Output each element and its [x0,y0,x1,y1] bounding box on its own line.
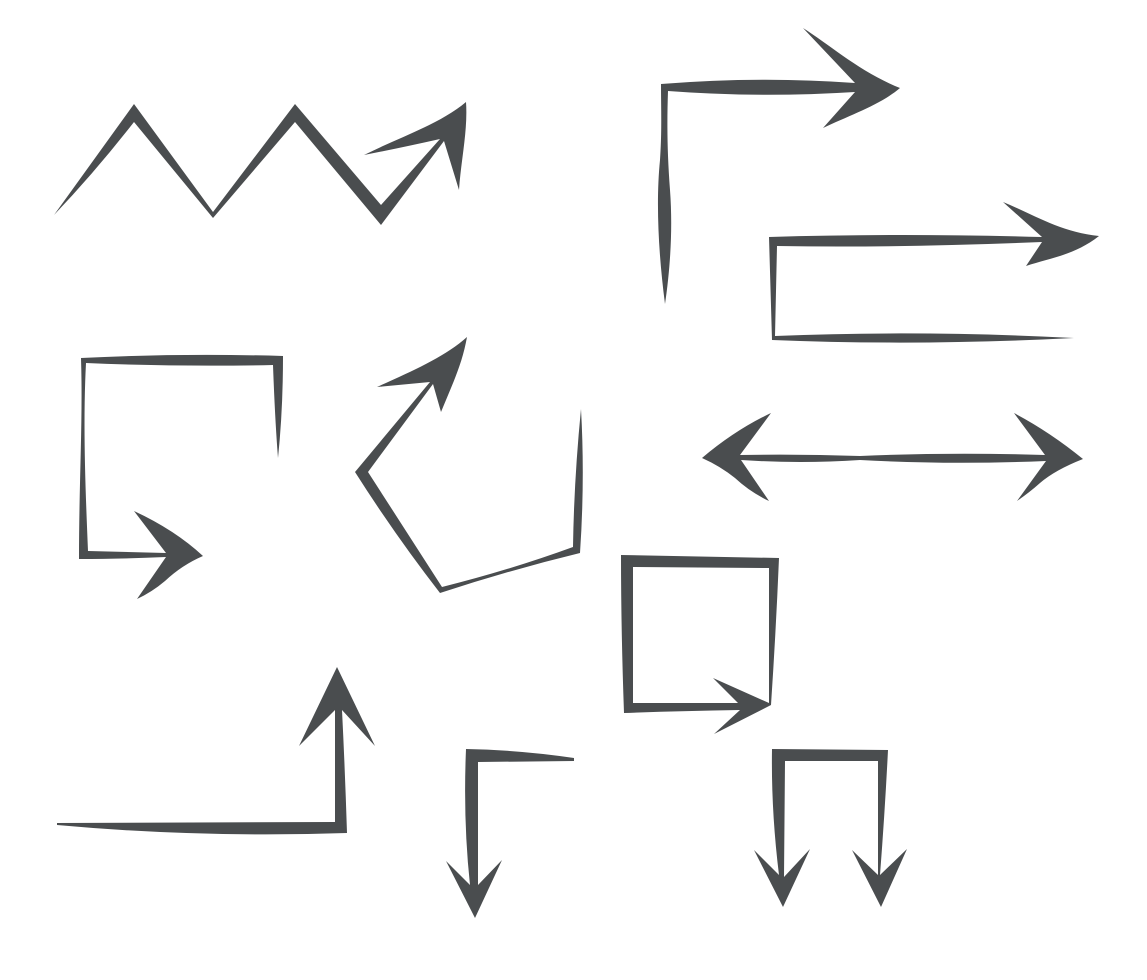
arrow: zigzag pointing up-right [54,102,466,225]
arrow: pentagon path pointing up-right [355,337,583,593]
arrow: square loop pointing right [79,355,283,599]
arrow: fork with two heads pointing down [754,749,907,907]
arrow: double-headed horizontal [702,413,1083,501]
arrow: elbow pointing down [446,749,574,918]
arrow: elbow right then up [57,667,375,834]
arrow: U-turn pointing right [769,202,1099,343]
arrow: square spiral pointing right [621,555,779,734]
arrow: elbow up then right [658,28,900,304]
